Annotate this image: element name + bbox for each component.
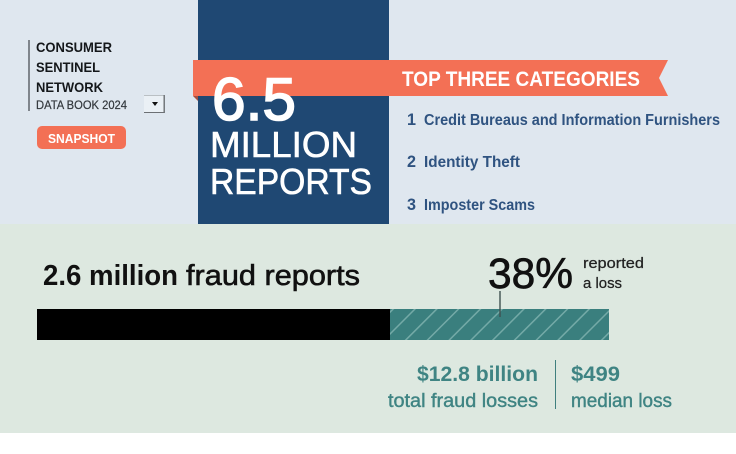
category 3: Imposter Scams (424, 197, 535, 214)
dropdown control (144, 95, 165, 113)
panel: navy total reports column (198, 0, 389, 224)
panel: top background (0, 0, 736, 224)
headline number: 6.5 million reports (210, 66, 372, 202)
bar segment: reported a loss (390, 309, 609, 340)
panel: fraud background (0, 224, 736, 433)
ribbon banner (193, 60, 668, 101)
headline number: 6.5 million reports: REPORTS (210, 161, 372, 202)
headline number: 6.5 million reports: MILLION (210, 124, 357, 165)
heading: fraud reports (43, 260, 360, 292)
callout: 38 percent reported a loss: a loss (583, 275, 622, 292)
category 3: 3 (407, 195, 416, 214)
stat: total fraud losses (388, 363, 538, 412)
title block: DATA BOOK 2024 (36, 98, 127, 112)
category 2: 2 (407, 152, 416, 171)
bar segment: no loss (37, 309, 390, 340)
snapshot button: SNAPSHOT (48, 131, 115, 146)
stat: total fraud losses: $12.8 billion (417, 363, 538, 386)
callout: 38 percent reported a loss: reported (583, 255, 644, 272)
callout: 38 percent reported a loss (488, 250, 644, 298)
heading: top three categories: TOP THREE CATEGORIES (402, 68, 640, 91)
leader line (499, 291, 501, 317)
stat: median loss (571, 363, 672, 412)
stat: total fraud losses: total fraud losses (388, 391, 538, 412)
title block: SENTINEL (36, 59, 100, 75)
category list (407, 110, 720, 214)
category 1: 1 (407, 110, 416, 129)
headline number: 6.5 million reports: 6.5 (212, 66, 296, 133)
category 2: Identity Theft (424, 154, 520, 171)
title block: NETWORK (36, 79, 103, 95)
title block: CONSUMER (36, 39, 112, 55)
callout: 38 percent reported a loss: 38% (488, 250, 573, 298)
heading: fraud reports: fraud reports (186, 260, 360, 292)
snapshot button (37, 126, 126, 149)
stat: median loss: $499 (571, 363, 620, 386)
title block (28, 39, 127, 112)
category 1: Credit Bureaus and Information Furnishers (424, 112, 720, 129)
heading: fraud reports: 2.6 million (43, 260, 178, 292)
stat divider (555, 360, 556, 409)
stat: median loss: median loss (571, 391, 672, 412)
bar chart: share of reports with a loss (37, 309, 609, 340)
